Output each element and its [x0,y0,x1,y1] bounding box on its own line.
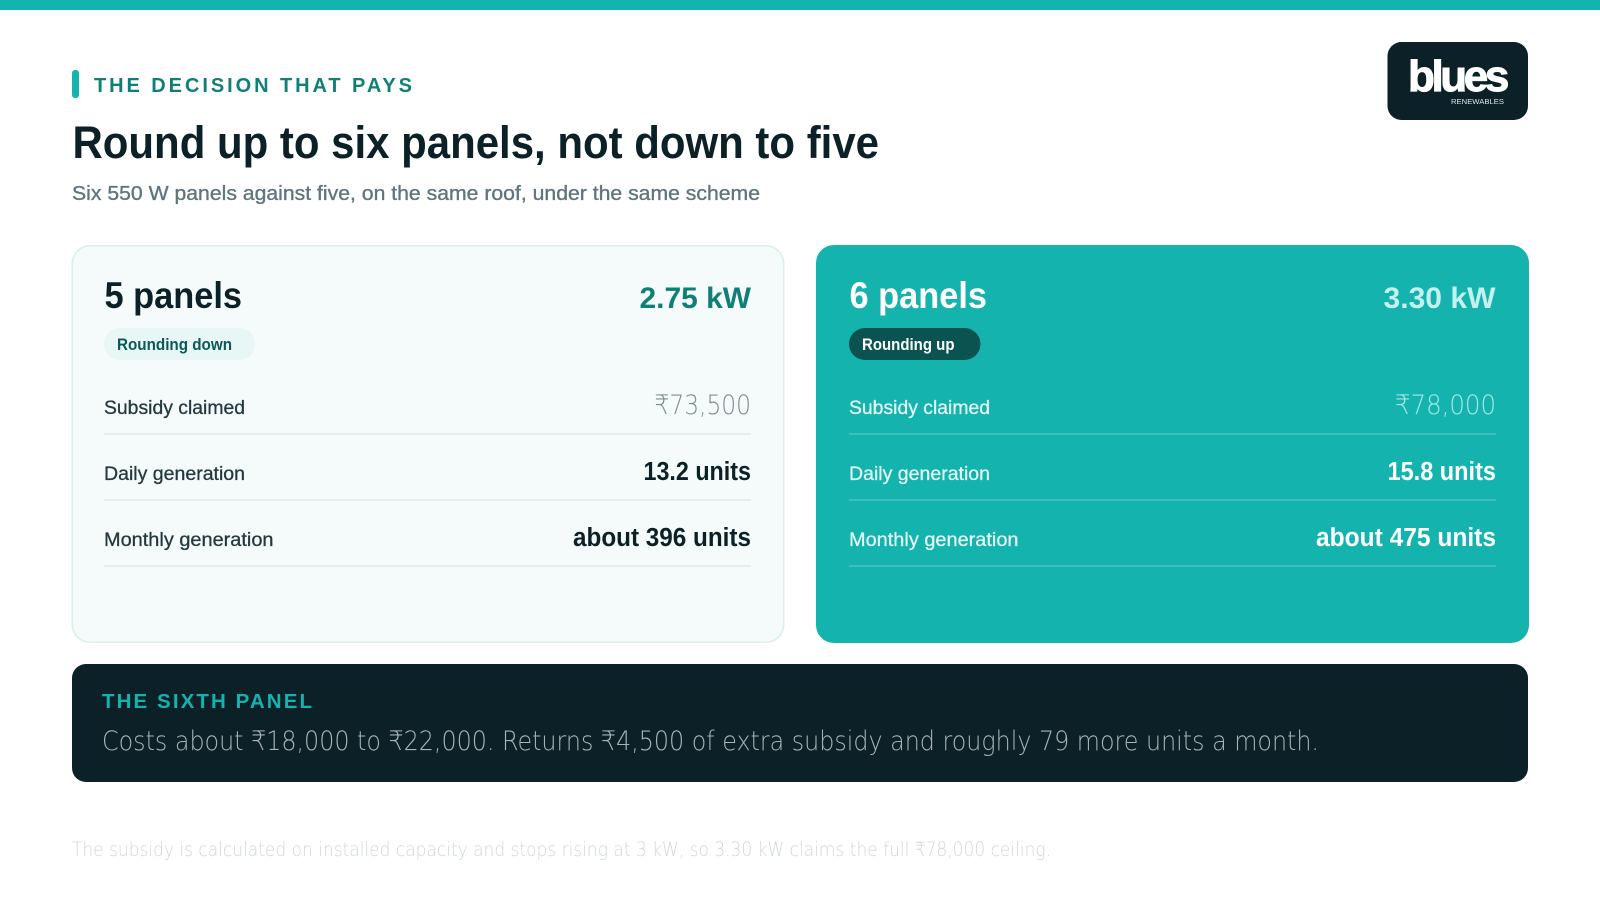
row: subsidy claimed: ₹73,500 [654,390,751,421]
row: daily generation [849,458,1496,501]
subtitle: Six 550 W panels against five, on the same roof, under the same scheme [72,182,760,205]
row: subsidy claimed [104,390,751,435]
callout label: THE SIXTH PANEL [102,690,312,713]
row: monthly generation: about 475 units [1316,524,1496,552]
eyebrow label: THE DECISION THAT PAYS [94,75,412,97]
heading: 6 panels: 6 panels [850,275,987,316]
row: daily generation: 15.8 units [1388,458,1496,486]
logo: blues [1408,52,1508,101]
logo: RENEWABLES [1451,97,1504,106]
top accent bar [0,0,1600,10]
capacity: 2.75 kW: 2.75 kW [640,282,752,315]
title: Round up to six panels, not down to five [72,117,879,168]
row: monthly generation: Monthly generation [104,529,274,551]
row: subsidy claimed: ₹78,000 [1395,390,1496,421]
footnote: The subsidy is calculated on installed capacity and stops rising at 3 kW, so 3.30 kW claims the full ₹78,000 ceiling. [72,838,1051,861]
badge: rounding up [849,328,980,360]
row: subsidy claimed: Subsidy claimed [849,397,990,419]
row: monthly generation [104,524,751,567]
panel: 6 panels [816,245,1529,643]
header [72,70,879,205]
row: daily generation: 13.2 units [644,458,751,486]
panel: 5 panels [72,246,784,642]
row: subsidy claimed: Subsidy claimed [104,397,245,419]
badge: rounding up: Rounding up [862,336,954,354]
row: daily generation: Daily generation [849,463,990,485]
badge: rounding down: Rounding down [117,336,232,354]
callout: the sixth panel [72,664,1528,782]
badge: rounding down [104,328,255,360]
row: daily generation [104,458,751,501]
eyebrow marker [72,70,79,98]
callout body: Costs about ₹18,000 to ₹22,000. Returns ₹4,500 of extra subsidy and roughly 79 more units a month. [102,726,1319,757]
row: daily generation: Daily generation [104,463,245,485]
row: monthly generation: Monthly generation [849,529,1018,551]
heading: 5 panels: 5 panels [104,275,242,316]
capacity: 3.30 kW: 3.30 kW [1384,282,1496,315]
row: monthly generation: about 396 units [573,524,751,552]
row: subsidy claimed [849,390,1496,435]
logo [1388,42,1528,120]
row: monthly generation [849,524,1496,567]
